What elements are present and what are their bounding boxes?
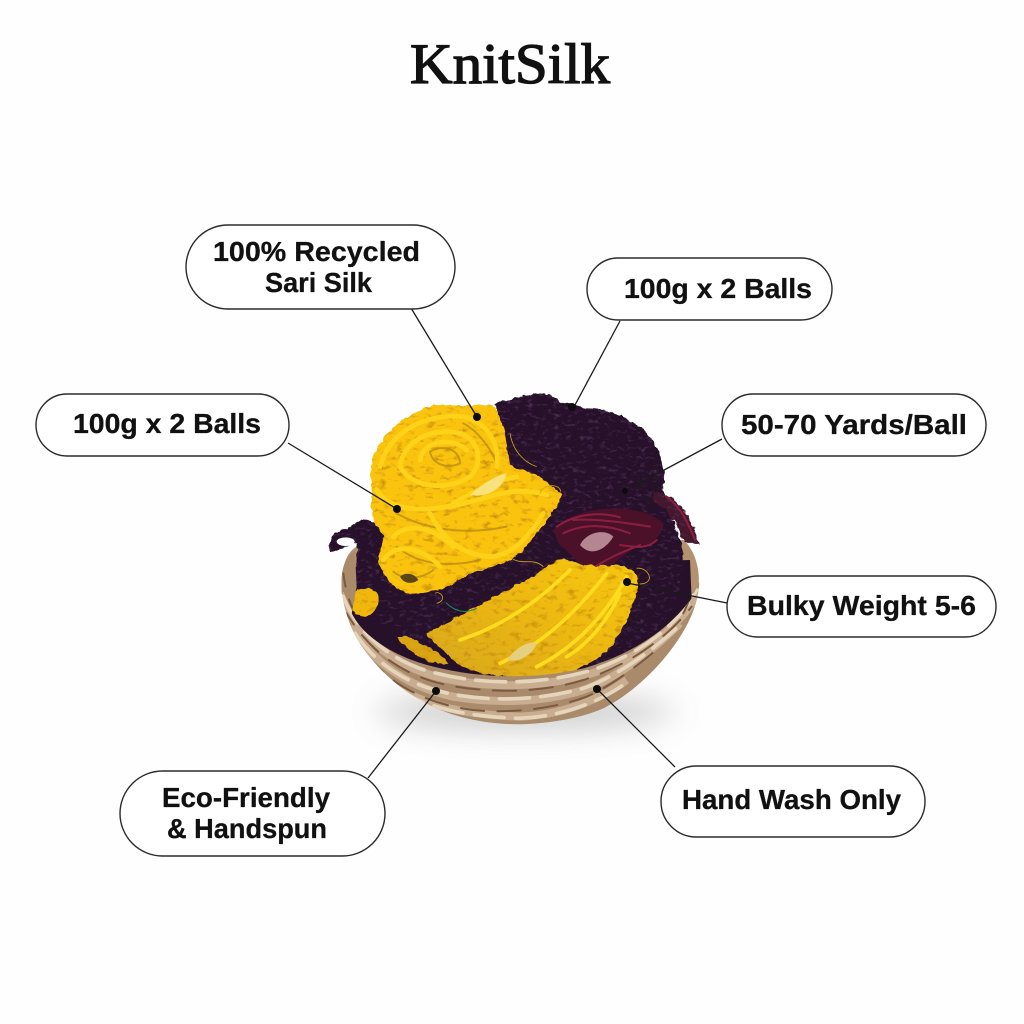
leader line <box>627 583 727 603</box>
label line 1: 100% Recycled <box>213 236 420 267</box>
purple yarn <box>330 393 700 663</box>
illustration: yarn basket <box>330 393 707 730</box>
anchor dot <box>473 413 481 421</box>
green fibre <box>446 603 477 611</box>
pill <box>36 394 289 456</box>
callout: 100g x 2 Balls (top right) <box>568 258 832 411</box>
lower yarn pale fleck <box>507 642 537 661</box>
bowl base <box>342 552 700 724</box>
callout: Hand Wash Only <box>593 685 925 837</box>
small yellow tuft <box>345 588 378 617</box>
label line 1: Eco-Friendly <box>162 782 330 813</box>
pill <box>722 394 986 456</box>
leader line <box>411 308 477 417</box>
leader line <box>597 689 675 767</box>
anchor dot <box>593 685 601 693</box>
maroon strands <box>557 497 695 570</box>
basket shadow <box>375 694 675 730</box>
pale yarn highlight <box>470 473 507 496</box>
weave band mid tone <box>340 593 698 717</box>
callout: 100% Recycled Sari Silk <box>186 225 481 421</box>
yellow yarn <box>345 403 638 678</box>
rose bright strands <box>377 416 547 567</box>
pill <box>186 225 455 309</box>
label: 50-70 Yards/Ball <box>741 409 967 440</box>
anchor dot <box>623 578 631 586</box>
stray fibres <box>435 433 649 603</box>
pink highlight <box>580 532 613 551</box>
weave dark strands <box>343 567 695 711</box>
leader line <box>575 321 620 405</box>
label: Bulky Weight 5-6 <box>747 590 976 621</box>
right maroon tail <box>653 492 700 543</box>
basket back <box>342 540 699 633</box>
anchor dot <box>622 488 628 494</box>
label line 2: Sari Silk <box>265 267 372 298</box>
small yellow tuft lower <box>397 636 450 664</box>
pill <box>587 258 832 320</box>
dark hollow in rose <box>400 574 418 583</box>
anchor dot <box>393 505 401 513</box>
leader line <box>288 443 397 509</box>
pill <box>727 576 996 637</box>
label: Hand Wash Only <box>682 784 901 815</box>
infographic: KnitSilk product callouts <box>35 42 997 857</box>
pill <box>120 771 385 856</box>
callout: Bulky Weight 5-6 <box>623 576 996 637</box>
anchor dot <box>568 403 576 411</box>
title: KnitSilk <box>410 33 611 96</box>
dark purple yarn mass <box>330 393 683 663</box>
label: 100g x 2 Balls <box>73 408 261 439</box>
lower yellow yarn <box>427 558 638 678</box>
label: 100g x 2 Balls <box>624 273 812 304</box>
maroon yarn <box>553 508 663 575</box>
basket interior <box>350 560 692 678</box>
label line 2: & Handspun <box>167 813 327 844</box>
callout: Eco-Friendly & Handspun <box>120 687 440 856</box>
pill <box>661 766 925 837</box>
callout: 100g x 2 Balls (left) <box>36 394 401 513</box>
woven basket bowl <box>342 552 700 724</box>
callout: 50-70 Yards/Ball <box>622 394 986 494</box>
lower yarn strands <box>460 570 627 667</box>
weave light strands <box>343 590 697 718</box>
leader line <box>625 439 722 491</box>
leader line <box>368 691 436 778</box>
loop hole <box>337 537 355 546</box>
anchor dot <box>432 687 440 695</box>
main yellow yarn rose <box>371 403 562 594</box>
rose shadow strands <box>393 423 507 578</box>
